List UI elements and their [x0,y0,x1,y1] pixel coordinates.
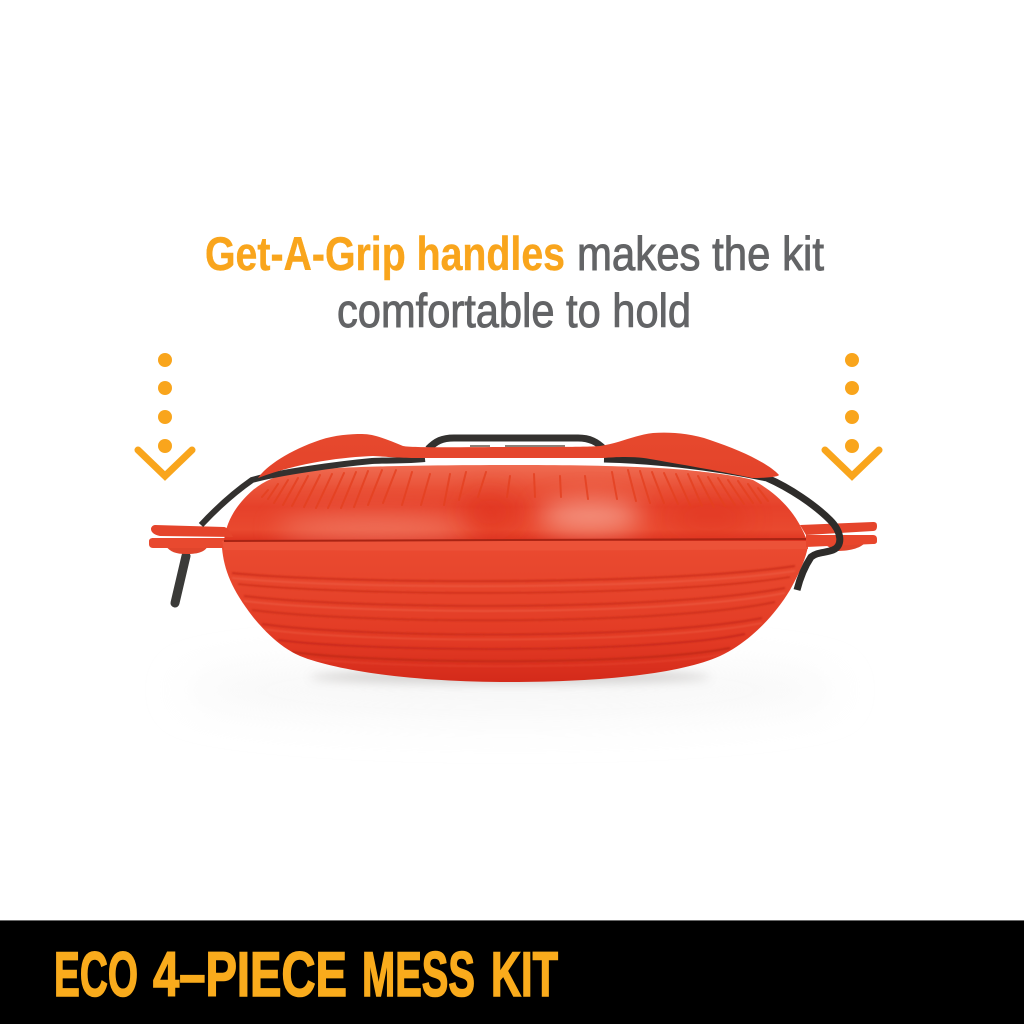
right wire [604,459,840,590]
arrow: left dotted down arrow [138,353,192,476]
lid flange left [151,525,233,537]
handle clip detail [470,445,565,447]
banner title: KIT [491,940,558,1010]
arrow: right dotted down arrow [825,353,879,476]
bowl [149,535,877,682]
infographic canvas [0,235,1024,1024]
headline: makes the kit [577,227,824,280]
lid flange right [800,522,877,535]
banner title: MESS [362,940,475,1010]
left grip handle [258,434,514,478]
lower flange tabs rear [166,546,208,554]
banner title: 4–PIECE [153,940,347,1010]
lid rib ticks [262,470,768,508]
banner [0,920,1024,1024]
product: mess kit [149,433,877,682]
banner title: ECO [54,940,138,1010]
left wire [201,459,425,525]
lid [151,465,877,541]
soft shadow under product [180,660,840,720]
headline [205,227,824,337]
right grip handle [514,433,779,478]
headline: Get-A-Grip handles [205,227,565,280]
headline: comfortable to hold [337,284,691,337]
wire top handle [428,438,604,449]
left locking pin [175,556,186,603]
lid seam [224,539,806,541]
bowl rim [149,538,232,548]
lid highlights [262,470,768,540]
